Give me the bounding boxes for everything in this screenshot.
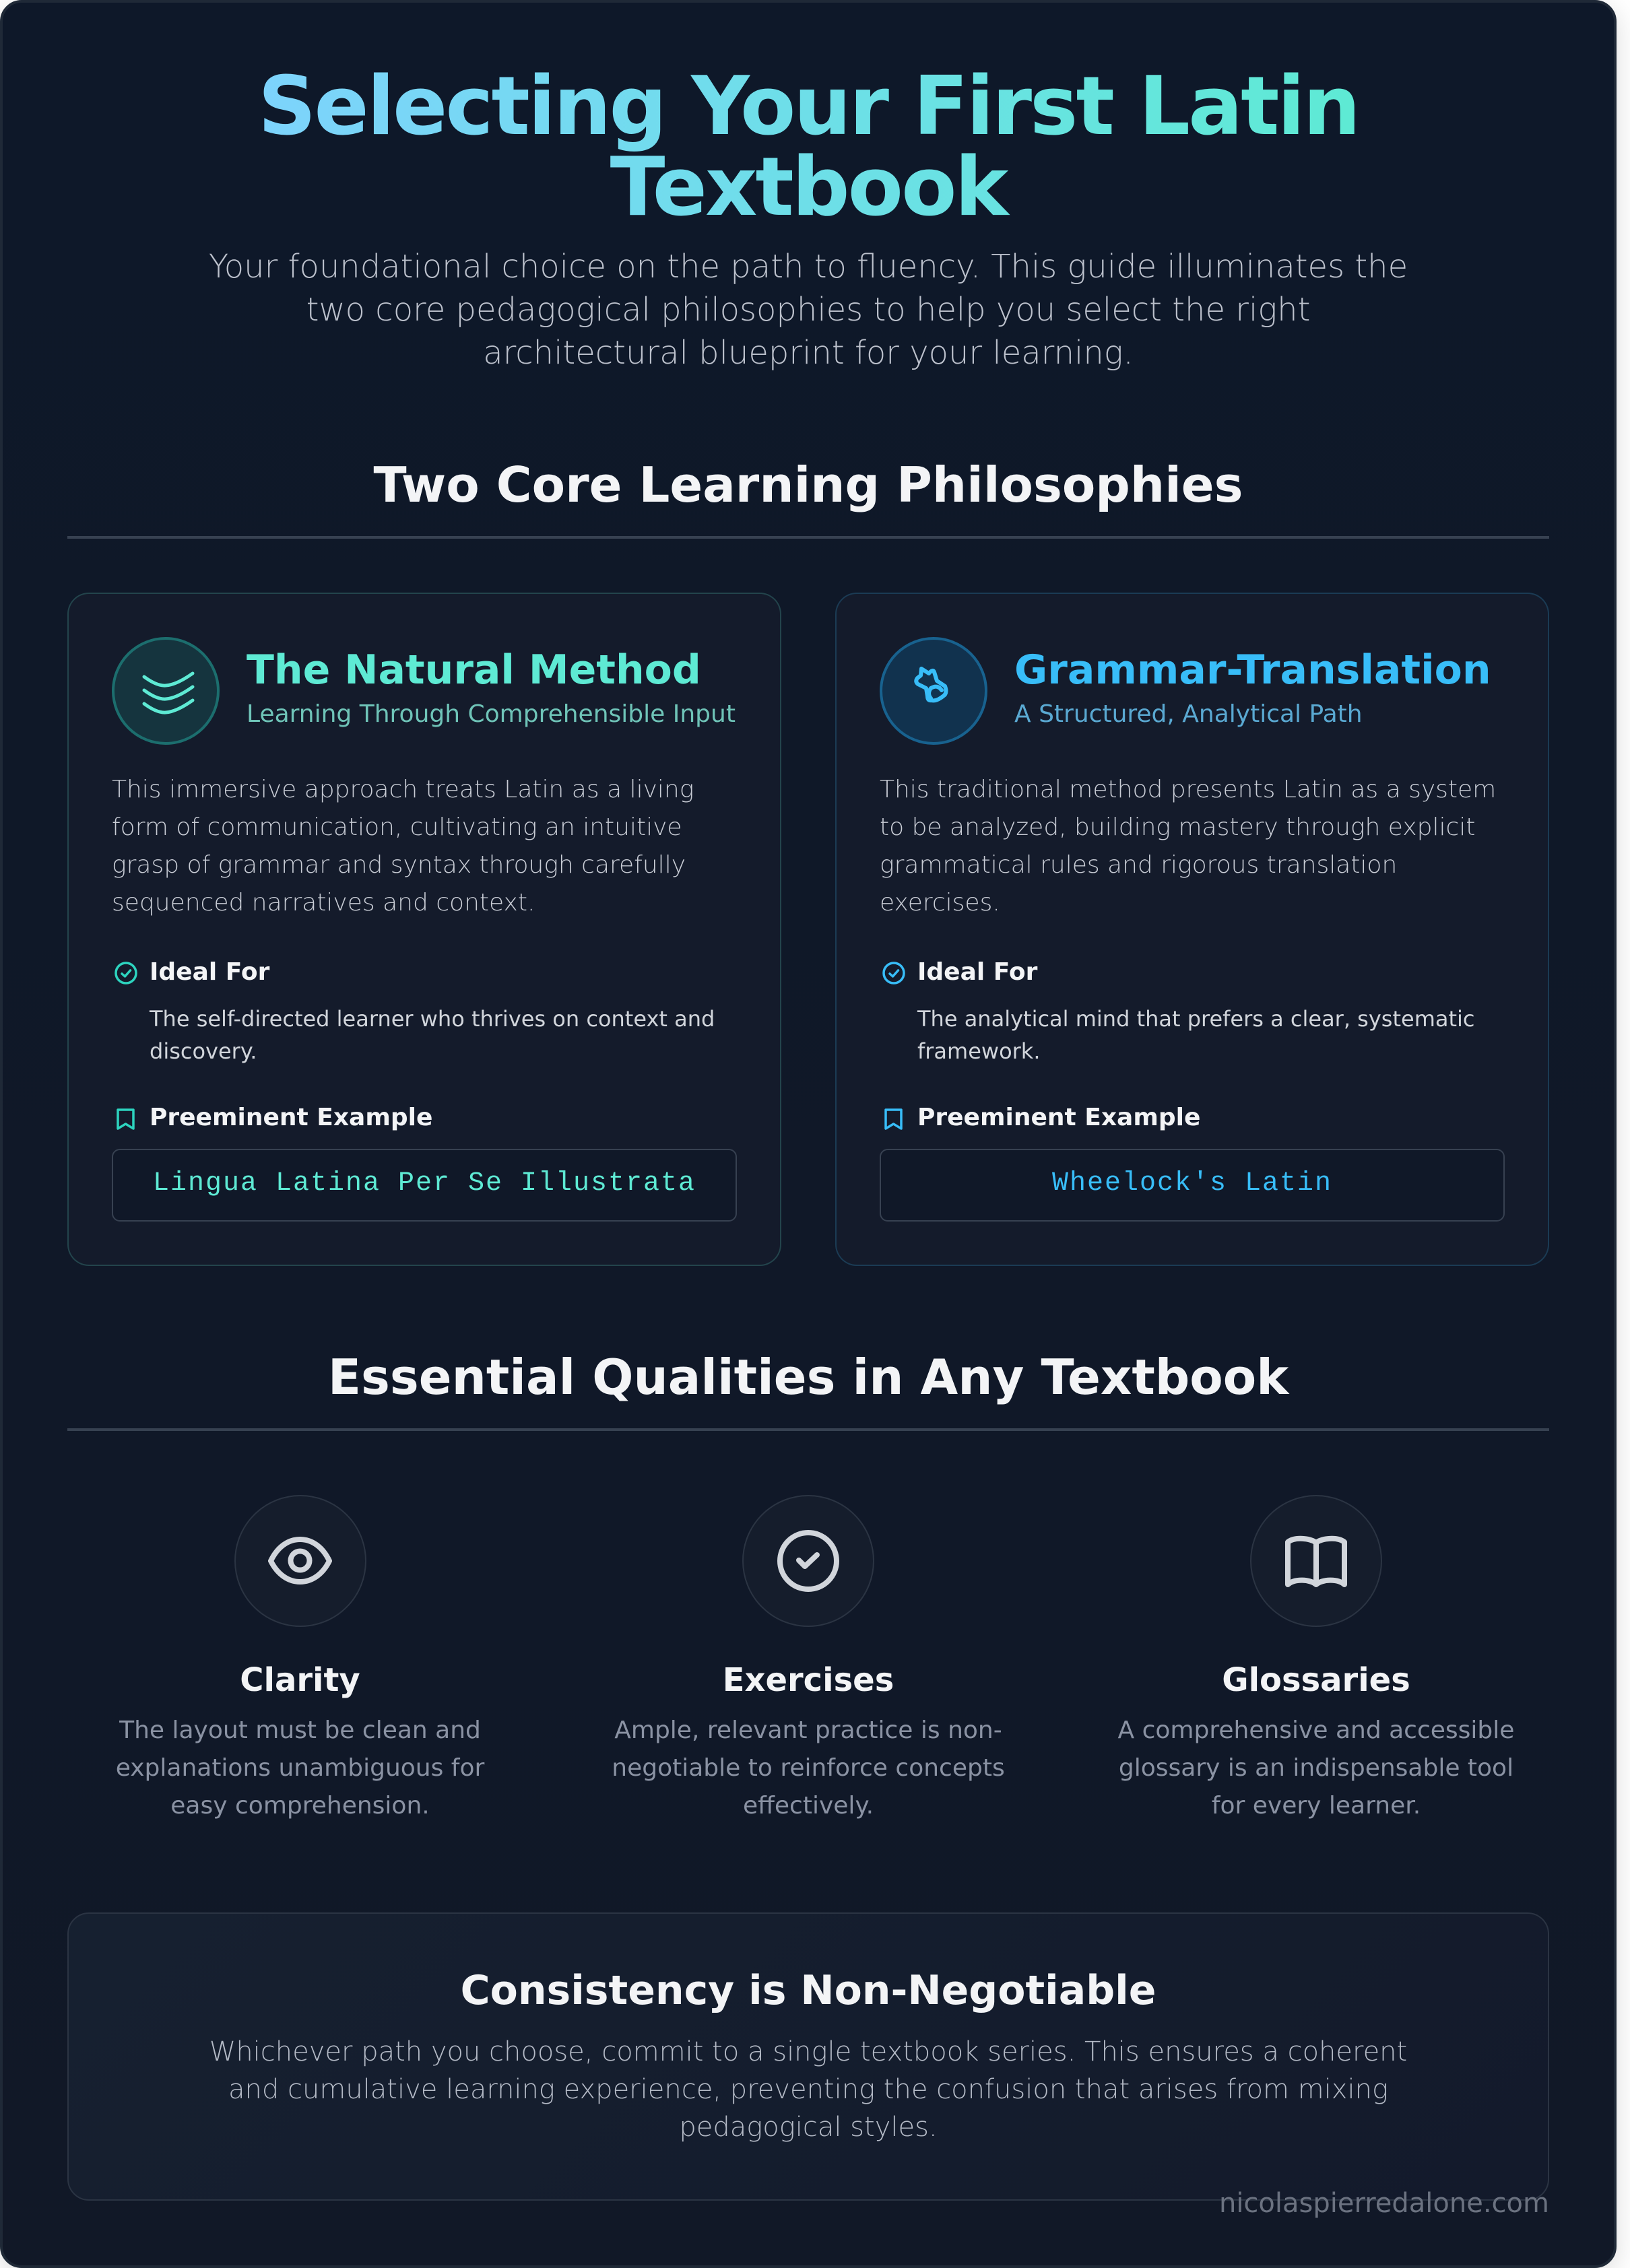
example book: Wheelock's Latin xyxy=(1052,1168,1332,1199)
description: to be analyzed, building mastery through explicit xyxy=(880,813,1475,841)
icon: bookmark xyxy=(884,1108,903,1130)
subtitle text xyxy=(209,248,1408,372)
example book: Lingua Latina Per Se Illustrata xyxy=(153,1168,696,1199)
panel: consistency callout xyxy=(67,1912,1549,2201)
description: grammatical rules and rigorous translation xyxy=(880,851,1397,879)
description xyxy=(880,776,1496,916)
panel: grammar-translation xyxy=(835,593,1549,1266)
description: This traditional method presents Latin as a system xyxy=(880,776,1496,803)
card title: The Natural Method xyxy=(247,646,701,694)
quality text: exercises: effectively. xyxy=(743,1792,874,1820)
ideal for text: The analytical mind that prefers a clear, systematic xyxy=(917,1006,1475,1032)
quality icon: open book xyxy=(1250,1495,1382,1627)
quality text: glossaries: for every learner. xyxy=(1212,1792,1421,1820)
quality text: exercises: Ample, relevant practice is non- xyxy=(614,1716,1002,1744)
ideal for text xyxy=(917,1006,1475,1064)
example book xyxy=(112,1149,737,1222)
quality text: glossaries: A comprehensive and accessible xyxy=(1118,1716,1514,1744)
quality heading: glossaries: Glossaries xyxy=(1222,1661,1410,1699)
quality heading: exercises: Exercises xyxy=(723,1661,894,1699)
subtitle text: Your foundational choice on the path to fluency. This guide illuminates the xyxy=(209,248,1408,286)
title: Selecting Your First Latin xyxy=(258,60,1359,154)
card subtitle: Learning Through Comprehensible Input xyxy=(247,700,736,728)
callout text: Whichever path you choose, commit to a single textbook series. This ensures a coherent xyxy=(209,2036,1407,2067)
icon: check circle xyxy=(882,962,905,985)
quality text: exercises: negotiable to reinforce concepts xyxy=(612,1754,1005,1782)
watermark: nicolaspierredalone.com xyxy=(1219,2188,1549,2219)
heading: two core learning philosophies: Two Core Learning Philosophies xyxy=(374,457,1243,513)
ideal for text: framework. xyxy=(917,1038,1040,1064)
heading: essential qualities: Essential Qualities in Any Textbook xyxy=(328,1349,1289,1405)
ideal for text: discovery. xyxy=(150,1038,257,1064)
subtitle text: two core pedagogical philosophies to help you select the right xyxy=(306,291,1310,329)
description: This immersive approach treats Latin as a living xyxy=(112,776,694,803)
quality text: glossaries: glossary is an indispensable tool xyxy=(1119,1754,1513,1782)
quality text: clarity: easy comprehension. xyxy=(170,1792,430,1820)
callout text: pedagogical styles. xyxy=(679,2112,938,2143)
description: exercises. xyxy=(880,889,1000,916)
label: ideal for: Ideal For xyxy=(917,958,1037,986)
callout heading: Consistency is Non-Negotiable xyxy=(461,1967,1156,2014)
card title: Grammar-Translation xyxy=(1014,646,1491,694)
label: preeminent example: Preeminent Example xyxy=(150,1104,432,1131)
callout text xyxy=(209,2036,1407,2143)
icon: layered waves xyxy=(112,637,220,745)
quality text: clarity xyxy=(116,1716,485,1820)
card subtitle: A Structured, Analytical Path xyxy=(1014,700,1363,728)
description: grasp of grammar and syntax through carefully xyxy=(112,851,686,879)
label: preeminent example: Preeminent Example xyxy=(917,1104,1200,1131)
quality text: glossaries xyxy=(1118,1716,1514,1820)
icon: bookmark xyxy=(117,1108,135,1130)
title xyxy=(258,60,1359,234)
ideal for text xyxy=(150,1006,715,1064)
description: form of communication, cultivating an intuitive xyxy=(112,813,682,841)
quality icon: check circle xyxy=(742,1495,874,1627)
quality text: exercises xyxy=(612,1716,1005,1820)
quality icon: eye xyxy=(234,1495,366,1627)
quality text: clarity: The layout must be clean and xyxy=(119,1716,481,1744)
panel: the natural method xyxy=(67,593,781,1266)
icon: puzzle shape xyxy=(880,637,987,745)
label: ideal for: Ideal For xyxy=(150,958,269,986)
ideal for text: The self-directed learner who thrives on context and xyxy=(150,1006,715,1032)
subtitle text: architectural blueprint for your learning. xyxy=(483,334,1134,372)
title: Textbook xyxy=(610,141,1006,234)
icon: check circle xyxy=(115,962,137,985)
quality heading: clarity: Clarity xyxy=(240,1661,360,1699)
callout text: and cumulative learning experience, preventing the confusion that arises from mixing xyxy=(228,2074,1388,2105)
example book xyxy=(880,1149,1505,1222)
quality text: clarity: explanations unambiguous for xyxy=(116,1754,484,1782)
description xyxy=(112,776,694,916)
description: sequenced narratives and context. xyxy=(112,889,535,916)
